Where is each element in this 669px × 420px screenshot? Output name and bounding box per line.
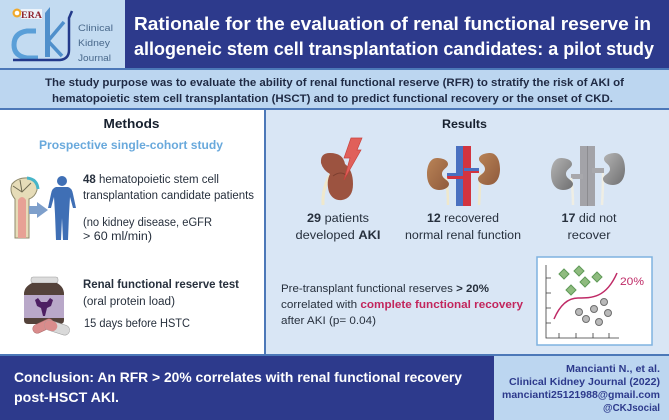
text: patients: > 60 ml/min) bbox=[83, 231, 152, 243]
left kidney bbox=[551, 158, 573, 190]
panel: conclusion: post-HSCT AKI. bbox=[14, 389, 119, 405]
panel: citation bbox=[494, 356, 669, 420]
title: Rationale for the evaluation of renal functional reserve in bbox=[134, 13, 651, 34]
icon: injured kidney bbox=[321, 138, 362, 205]
text: 17 did not recover bbox=[562, 213, 617, 242]
text: patients: 48 hematopoietic stem cell bbox=[83, 174, 219, 186]
icon: non-recovered kidneys bbox=[551, 146, 625, 206]
panel: citation: mancianti25121988@gmail.com bbox=[502, 390, 660, 401]
text: 29 patients: 29 patients bbox=[307, 213, 369, 225]
text: 17 did not recover: 17 did not bbox=[562, 213, 617, 225]
label: 20%: 20% bbox=[620, 276, 644, 288]
subheading: study type: Prospective single-cohort study bbox=[39, 138, 223, 152]
text: 12 recovered: 12 recovered bbox=[427, 213, 499, 225]
text: correlation finding: after AKI (p= 0.04) bbox=[281, 315, 376, 327]
panel: results bbox=[264, 110, 669, 355]
journal name: Journal bbox=[78, 53, 111, 64]
heading: results: Results bbox=[442, 117, 487, 131]
panel: study purpose: hematopoietic stem cell transplantation (HSCT) and to predict functional recovery or the onset of CKD. bbox=[52, 93, 613, 105]
text: renal functional reserve test: (oral protein load) bbox=[83, 296, 175, 308]
text: renal functional reserve test: Renal functional reserve test bbox=[83, 279, 239, 291]
left kidney bbox=[427, 158, 449, 190]
text: 29 patients: developed AKI bbox=[296, 230, 380, 242]
journal name: Kidney bbox=[78, 38, 110, 49]
text: correlation finding: Pre-transplant functional reserves > 20% bbox=[281, 283, 489, 295]
icon: healthy kidneys bbox=[427, 146, 500, 206]
text: 29 patients bbox=[296, 213, 380, 242]
text: 12 recovered bbox=[405, 213, 521, 242]
heading: methods: Methods bbox=[104, 117, 160, 131]
text: renal functional reserve test: 15 days before HSTC bbox=[84, 316, 190, 330]
panel: citation: @CKJsocial bbox=[603, 403, 660, 414]
panel: study purpose bbox=[0, 68, 669, 110]
panel: citation: Clinical Kidney Journal (2022) bbox=[509, 377, 660, 388]
text: patients: (no kidney disease, eGFR bbox=[83, 217, 212, 229]
panel: study purpose: The study purpose was to evaluate the ability of renal functional reserve (RFR) to stratify the risk of AKI of bbox=[45, 77, 625, 89]
panel: conclusion: Conclusion: An RFR > 20% correlates with renal functional recovery bbox=[14, 369, 462, 385]
green diamonds bbox=[559, 266, 602, 295]
grey circles bbox=[576, 298, 612, 326]
panel: methods bbox=[0, 110, 264, 355]
text: correlation finding bbox=[281, 283, 524, 327]
right kidney bbox=[478, 153, 500, 185]
panel: title banner bbox=[125, 0, 669, 69]
icon: patient silhouette bbox=[48, 176, 76, 240]
text: patients: transplantation candidate patients bbox=[83, 190, 254, 202]
title: allogeneic stem cell transplantation candidates: a pilot study bbox=[134, 38, 655, 59]
text: 12 recovered: normal renal function bbox=[405, 230, 521, 242]
icon: ckj monogram bbox=[13, 7, 72, 60]
text: correlation finding: correlated with complete functional recovery bbox=[281, 299, 524, 311]
icon: protein jar and pills bbox=[24, 277, 71, 336]
icon: ERA badge: ERA bbox=[21, 10, 43, 20]
journal name bbox=[78, 23, 113, 64]
right kidney bbox=[603, 153, 625, 185]
text: patients bbox=[83, 174, 254, 243]
text: renal functional reserve test bbox=[83, 279, 239, 330]
icon: bone marrow to patient bbox=[11, 176, 76, 240]
journal name: Clinical bbox=[78, 23, 113, 34]
text: 17 did not recover: recover bbox=[568, 230, 611, 242]
panel: journal logo bbox=[0, 0, 125, 69]
panel: conclusion bbox=[0, 354, 669, 420]
title bbox=[134, 13, 655, 59]
chart: scatter with 20% threshold curve bbox=[537, 257, 652, 345]
panel: citation: Mancianti N., et al. bbox=[566, 364, 660, 375]
threshold curve bbox=[554, 273, 617, 319]
